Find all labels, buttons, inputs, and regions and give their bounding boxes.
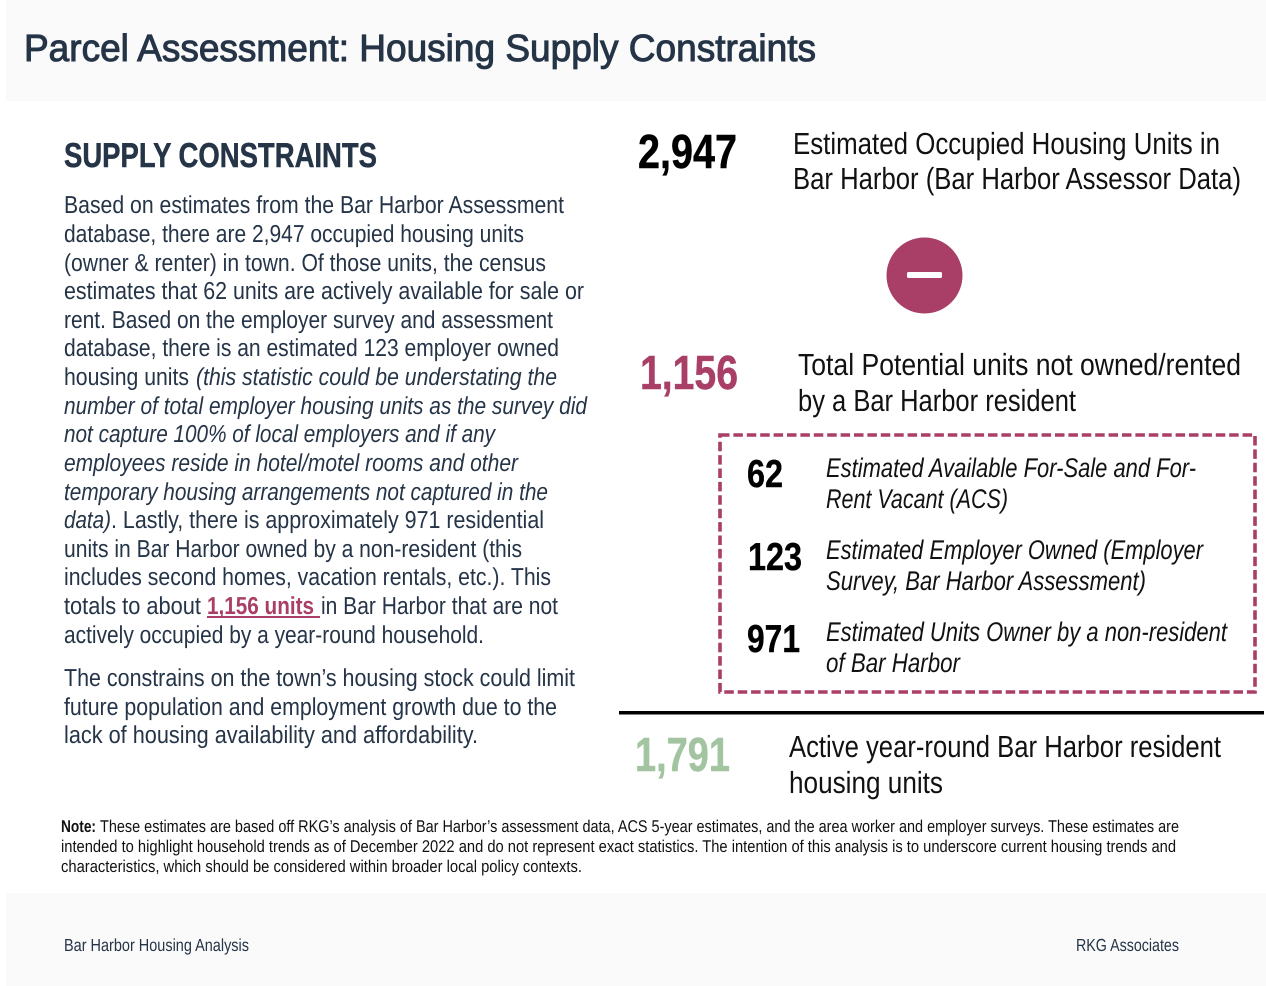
stat: vacant available units [747, 453, 1196, 514]
stat: potential units not owned by resident [640, 347, 1241, 418]
text block: first paragraph: estimates that 62 units are actively available for sale or [64, 278, 584, 305]
stat: non-resident owned units: of Bar Harbor [826, 648, 961, 678]
footer: report name: Bar Harbor Housing Analysis [64, 935, 249, 955]
text block: first paragraph: data) [64, 507, 111, 534]
text block: second paragraph: future population and employment growth due to the [64, 694, 557, 721]
stat: active year-round units: 1,791 [635, 729, 730, 782]
stat: potential units not owned by resident: 1,156 [640, 347, 738, 400]
panel: supply constraints narrative [64, 137, 588, 749]
text block: first paragraph: not capture 100% of local employers and if any [64, 421, 496, 448]
text block: note: characteristics, which should be considered within broader local policy contexts. [61, 857, 582, 876]
text block: first paragraph: in Bar Harbor that are not [321, 593, 558, 620]
text block: first paragraph [64, 192, 588, 649]
text block: second paragraph: lack of housing availability and affordability. [64, 722, 478, 749]
text block: first paragraph: (this statistic could be understating the [196, 364, 557, 391]
text block: second paragraph [64, 665, 575, 749]
stat: active year-round units [635, 729, 1221, 800]
text block: note [61, 817, 1179, 876]
stat: non-resident owned units [747, 617, 1228, 678]
text block: first paragraph: database, there is an estimated 123 employer owned [64, 335, 559, 362]
text block: first paragraph: units in Bar Harbor owned by a non-resident (this [64, 536, 522, 563]
heading: supply constraints: SUPPLY CONSTRAINTS [64, 137, 377, 175]
text block: first paragraph: Based on estimates from the Bar Harbor Assessment [64, 192, 564, 219]
text block: first paragraph: (owner & renter) in town. Of those units, the census [64, 250, 546, 277]
text block: first paragraph: actively occupied by a year-round household. [64, 622, 484, 649]
stat: vacant available units: 62 [747, 453, 783, 496]
stat: employer owned units: Survey, Bar Harbor Assessment) [826, 566, 1146, 596]
text block: first paragraph: 1,156 units [207, 593, 314, 620]
stat: non-resident owned units: 971 [747, 618, 800, 661]
stat: occupied housing units: 2,947 [638, 126, 737, 179]
text block: first paragraph: employees reside in hotel/motel rooms and other [64, 450, 519, 477]
text block: first paragraph: rent. Based on the employer survey and assessment [64, 307, 553, 334]
text block: first paragraph: number of total employer housing units as the survey did [64, 393, 588, 420]
text block: first paragraph: temporary housing arrangements not captured in the [64, 479, 548, 506]
footer band [6, 893, 1266, 986]
stat: employer owned units [748, 535, 1204, 596]
stat: employer owned units: 123 [748, 536, 802, 579]
text block: first paragraph: database, there are 2,947 occupied housing units [64, 221, 524, 248]
stat: active year-round units: housing units [789, 766, 943, 800]
stat: potential units not owned by resident: by a Bar Harbor resident [798, 384, 1076, 418]
text block: note: Note: [61, 817, 96, 836]
stat: vacant available units: Rent Vacant (ACS) [826, 484, 1008, 514]
header band [6, 0, 1266, 101]
text block: first paragraph: includes second homes, vacation rentals, etc.). This [64, 564, 551, 591]
stat: occupied housing units [638, 126, 1241, 196]
text block: first paragraph: housing units [64, 364, 189, 391]
panel: dashed breakdown box [720, 435, 1255, 692]
title: Parcel Assessment: Housing Supply Constraints [24, 28, 816, 70]
text block: first paragraph: totals to about [64, 593, 201, 620]
text block: second paragraph: The constrains on the town’s housing stock could limit [64, 665, 575, 692]
footer: author: RKG Associates [1076, 935, 1179, 955]
text block: first paragraph: . Lastly, there is approximately 971 residential [111, 507, 544, 534]
icon: minus sign [886, 238, 962, 314]
